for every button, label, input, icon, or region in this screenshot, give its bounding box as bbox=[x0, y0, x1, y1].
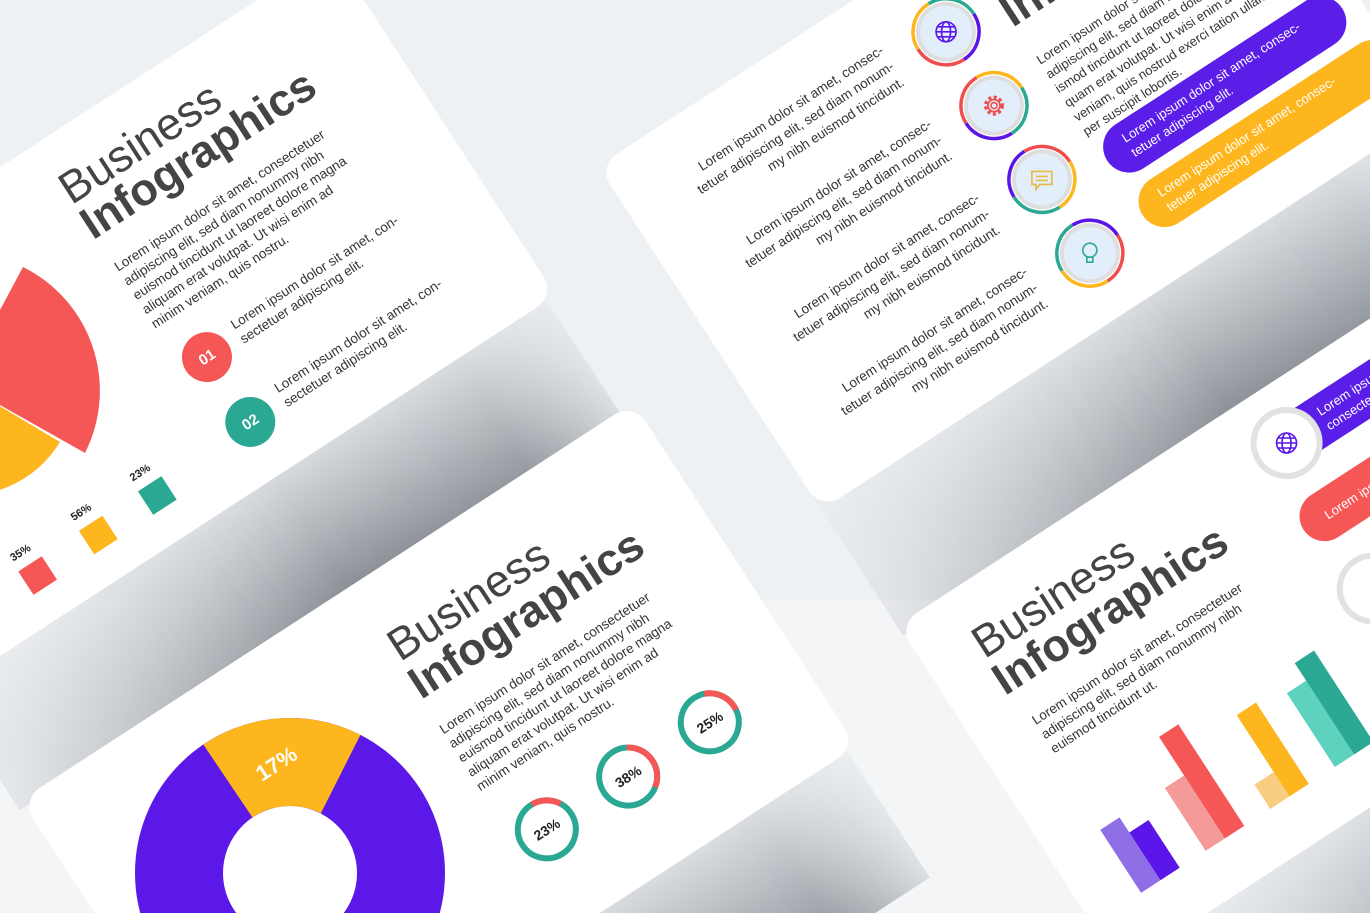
paragraph C: aliquam erat volutpat. Ut wisi enim ad bbox=[465, 645, 661, 780]
text blocks B: tetuer adipiscing elit, sed diam nonum- bbox=[742, 132, 944, 271]
heading D: Business bbox=[962, 525, 1143, 668]
pill: yellow bbox=[1129, 30, 1370, 237]
text blocks B: Lorem ipsum dolor sit amet, consec- bbox=[743, 116, 934, 248]
item 02: 02 bbox=[239, 411, 262, 434]
heading D: Infographics bbox=[983, 515, 1237, 705]
text blocks B: tetuer adipiscing elit, sed diam nonum- bbox=[694, 59, 896, 197]
paragraph B: per suscipit lobortis. bbox=[1080, 63, 1185, 139]
shadow: card A bbox=[0, 276, 623, 810]
icon circle D2 bbox=[1327, 543, 1370, 634]
text blocks B: tetuer adipiscing elit, sed diam nonum- bbox=[838, 280, 1040, 418]
panel: card A (pie chart slide) bbox=[0, 0, 556, 693]
shadow: card D bbox=[1208, 808, 1370, 913]
pill: purple D bbox=[1273, 259, 1370, 464]
heading C: Business bbox=[378, 528, 559, 671]
text blocks B: my nibh euismod tincidunt. bbox=[908, 296, 1051, 396]
donut chart: 17% bbox=[251, 741, 302, 786]
pie chart A bbox=[0, 267, 100, 496]
pill: yellow: Lorem ipsum dolor sit amet, consec- bbox=[1154, 73, 1338, 200]
donut chart bbox=[179, 718, 401, 913]
text blocks B: Lorem ipsum dolor sit amet, consec- bbox=[695, 43, 886, 174]
text blocks B: my nibh euismod tincidunt. bbox=[860, 222, 1003, 322]
paragraph C: euismod tincidunt ut laoreet dolore magna bbox=[455, 616, 675, 765]
paragraph A: Lorem ipsum dolor sit amet, consectetuer bbox=[112, 126, 328, 274]
legend: 35% bbox=[8, 542, 33, 564]
paragraph C bbox=[437, 587, 693, 794]
text blocks B: my nibh euismod tincidunt. bbox=[813, 148, 955, 248]
text blocks B: Lorem ipsum dolor sit amet, consec- bbox=[839, 264, 1030, 395]
item 01: 01 bbox=[196, 346, 219, 369]
text blocks B bbox=[684, 43, 1051, 434]
icon: globe circle D bbox=[1241, 397, 1332, 489]
paragraph A bbox=[112, 124, 368, 331]
pill: purple: tetuer adipiscing elit. bbox=[1128, 83, 1236, 160]
text blocks B: tetuer adipiscing elit, sed diam nonum- bbox=[790, 206, 992, 345]
text blocks B: my nibh euismod tincidunt. bbox=[765, 74, 907, 174]
item 01 bbox=[172, 208, 417, 392]
panel: card D (bar chart slide) bbox=[898, 227, 1370, 913]
ring charts: 38% bbox=[612, 762, 645, 791]
paragraph C: Lorem ipsum dolor sit amet, consectetuer bbox=[437, 589, 653, 737]
paragraph D: adipiscing elit, sed diam nonummy nibh bbox=[1038, 601, 1244, 742]
text blocks B: Lorem ipsum dolor sit amet, consec- bbox=[791, 190, 982, 321]
pill: purple: Lorem ipsum dolor sit amet, consec- bbox=[1119, 19, 1303, 145]
paragraph A: adipiscing elit, sed diam nonummy nibh bbox=[121, 148, 327, 288]
item 01: Lorem ipsum dolor sit amet, con- bbox=[228, 213, 401, 332]
legend: 56% bbox=[69, 501, 94, 524]
heading C: Infographics bbox=[399, 519, 653, 708]
paragraph D: Lorem ipsum dolor sit amet, consectetuer bbox=[1029, 580, 1245, 728]
pill: purple bbox=[1093, 0, 1356, 183]
paragraph C: adipiscing elit, sed diam nonummy nibh bbox=[446, 610, 652, 751]
paragraph B bbox=[1034, 0, 1297, 139]
paragraph D: euismod tincidunt ut. bbox=[1048, 676, 1160, 756]
ring charts: 25% bbox=[694, 708, 726, 737]
bar chart bbox=[1075, 640, 1370, 893]
shadow: card B bbox=[851, 154, 1370, 636]
item 02: Lorem ipsum dolor sit amet, con- bbox=[272, 276, 445, 396]
legend: 23% bbox=[128, 462, 153, 484]
shadow: card C bbox=[600, 758, 930, 913]
heading A: Infographics bbox=[71, 59, 325, 249]
icon circles B bbox=[900, 0, 1135, 299]
ring charts: 23% bbox=[531, 815, 563, 844]
panel: card B (icons list slide) bbox=[598, 0, 1370, 510]
item 02: sectetuer adipiscing elit. bbox=[281, 319, 410, 410]
heading A: Business bbox=[49, 72, 230, 214]
panel: card C (donut slide) bbox=[21, 402, 857, 913]
pill: yellow: tetuer adipiscing elit. bbox=[1164, 137, 1271, 214]
paragraph A: euismod tincidunt ut laoreet dolore magna bbox=[130, 153, 350, 303]
paragraph C: minim veniam, quis nostru. bbox=[474, 694, 617, 794]
ring charts bbox=[500, 669, 764, 879]
item 01: sectetuer adipiscing elit. bbox=[237, 255, 366, 346]
item 02 bbox=[216, 273, 461, 457]
paragraph A: minim veniam, quis nostru. bbox=[149, 231, 291, 331]
paragraph A: aliquam erat volutpat. Ut wisi enim ad bbox=[139, 182, 336, 317]
pill: red D bbox=[1290, 335, 1370, 551]
legend bbox=[6, 459, 178, 595]
